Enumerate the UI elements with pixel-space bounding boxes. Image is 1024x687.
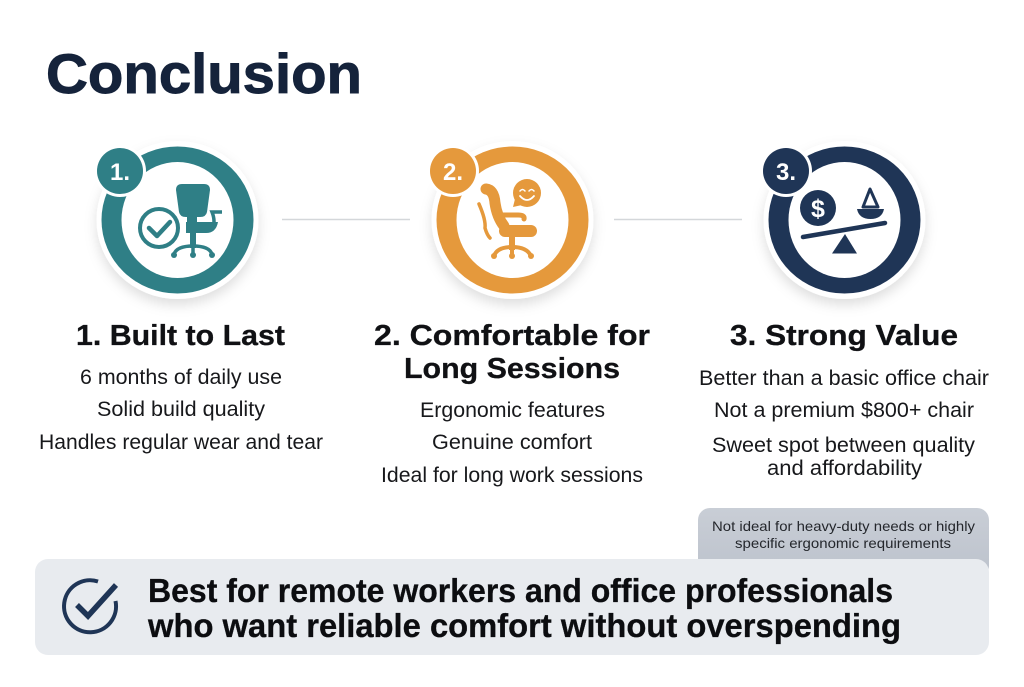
icon: teal ring with chair (96, 141, 258, 299)
icon: navy ring with balance scale: $ (811, 195, 825, 223)
text block: comfort details: Ideal for long work sessions (381, 464, 643, 487)
callout: limitations note: Not ideal for heavy-duty needs or highly (712, 518, 975, 534)
text block: value details: Sweet spot between quality (712, 434, 976, 457)
text block: built to last details: Solid build quality (97, 398, 266, 421)
text block: built to last details: Handles regular wear and tear (39, 431, 323, 454)
text block: recommendation: Best for remote workers and office professionals (148, 572, 893, 609)
heading: strong value: 3. Strong Value (730, 320, 958, 352)
callout: limitations note (698, 508, 989, 578)
heading: comfortable for long sessions (374, 320, 650, 385)
title: Conclusion (46, 42, 362, 105)
badge: number 1 (94, 145, 146, 197)
badge: number 2: 2. (443, 159, 463, 186)
icon: check mark (64, 580, 116, 632)
text block: comfort details (381, 399, 643, 487)
text block: value details: and affordability (767, 457, 923, 480)
panel: strong value (699, 141, 989, 480)
icon: orange ring with chair and smile (432, 141, 594, 299)
text block: value details (699, 367, 989, 480)
panel: comfortable for long sessions (374, 141, 650, 487)
badge: number 3 (760, 145, 812, 197)
badge: number 3: 3. (776, 159, 796, 186)
text block: value details: Better than a basic office chair (699, 367, 989, 390)
heading: built to last: 1. Built to Last (76, 320, 285, 352)
text block: built to last details (39, 366, 323, 454)
text block: value details: Not a premium $800+ chair (714, 399, 974, 422)
text block: recommendation (147, 572, 901, 644)
heading: comfortable for long sessions: 2. Comfortable for (374, 320, 650, 352)
text block: comfort details: Genuine comfort (432, 431, 592, 454)
heading: comfortable for long sessions: Long Sessions (404, 353, 620, 385)
panel: built to last (39, 141, 323, 454)
panel: recommendation banner (35, 559, 989, 655)
text block: comfort details: Ergonomic features (420, 399, 605, 422)
text block: recommendation: who want reliable comfort without overspending (147, 607, 901, 644)
text block: built to last details: 6 months of daily use (80, 366, 282, 389)
callout: limitations note: specific ergonomic requirements (735, 535, 951, 551)
badge: number 1: 1. (110, 159, 130, 186)
badge: number 2 (427, 145, 479, 197)
icon: navy ring with balance scale (764, 141, 926, 299)
